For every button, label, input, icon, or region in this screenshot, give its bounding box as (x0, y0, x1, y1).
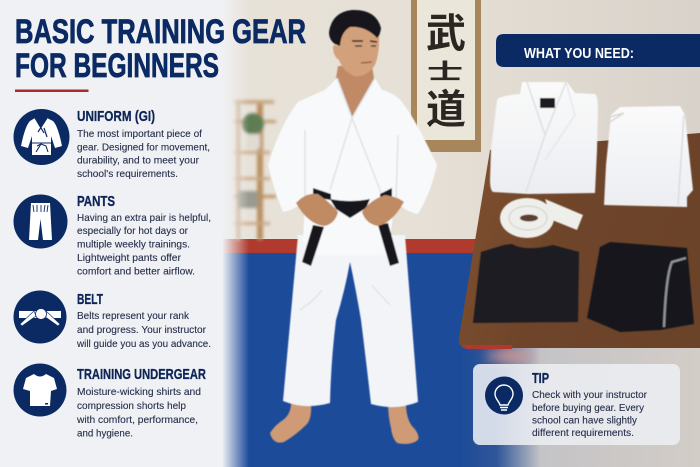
tip text: Check with your instructor (532, 389, 647, 401)
neck and head (329, 10, 381, 122)
belt text: and progress. Your instructor (77, 324, 206, 336)
belt text: Belts represent your rank (77, 310, 190, 322)
table front red edge (462, 345, 512, 349)
wooden shelf with plant (234, 100, 276, 240)
black shirt (473, 244, 579, 323)
white belt coil (500, 198, 583, 238)
icon: pants (14, 194, 68, 248)
icon: t-shirt (14, 364, 66, 416)
title: FOR BEGINNERS (15, 47, 219, 85)
undergear text: with comfort, performance, (76, 414, 198, 426)
tip heading: TIP (532, 371, 549, 387)
tip text: before buying gear. Every (532, 402, 645, 414)
pants (283, 235, 418, 407)
icon: gi jacket (14, 109, 70, 165)
uniform text: durability, and to meet your (77, 154, 199, 166)
title underline (15, 90, 88, 92)
pants text: multiple weekly trainings. (77, 238, 190, 250)
jacket (268, 78, 437, 255)
section: uniform (14, 109, 213, 180)
tip text: different requirements. (532, 427, 634, 439)
banner: what you need (496, 34, 700, 67)
folded gi jacket (490, 82, 598, 194)
hands (296, 194, 404, 226)
uniform text: gear. Designed for movement, (77, 142, 210, 154)
section: pants (14, 194, 214, 278)
uniform heading: UNIFORM (GI) (77, 109, 155, 125)
wooden table (459, 133, 700, 348)
wall scroll with kanji: 道 (426, 77, 466, 135)
folded pants (604, 106, 693, 207)
pants text: Having an extra pair is helpful, (77, 212, 211, 224)
tip text: school can have slightly (532, 414, 638, 426)
icon: light bulb (485, 376, 523, 414)
wall scroll with kanji: 士 (427, 54, 463, 86)
black compression shorts (587, 242, 694, 332)
icon: belt (14, 290, 66, 344)
tip card (473, 364, 680, 445)
black belt (302, 188, 399, 266)
uniform text: The most important piece of (77, 128, 202, 140)
belt text: will guide you as you advance. (76, 338, 211, 350)
belt heading: BELT (77, 292, 103, 308)
banner: what you need: WHAT YOU NEED: (524, 46, 634, 62)
pants text: Lightweight pants offer (77, 252, 181, 264)
section: belt (14, 290, 211, 350)
section: training undergear (14, 364, 206, 440)
pants heading: PANTS (77, 194, 115, 210)
pants text: especially for hot days or (77, 225, 188, 237)
wall scroll with kanji: 武 (426, 1, 466, 59)
undergear text: Moisture-wicking shirts and (77, 386, 201, 398)
title: BASIC TRAINING GEAR (15, 13, 306, 51)
undergear text: compression shorts help (77, 400, 186, 412)
undergear heading: TRAINING UNDERGEAR (77, 367, 206, 383)
feet (270, 403, 418, 444)
pants text: comfort and better airflow. (77, 266, 195, 278)
person in white gi (268, 10, 437, 444)
undergear text: and hygiene. (77, 428, 133, 440)
uniform text: school's requirements. (77, 168, 178, 180)
wall scroll with kanji (411, 0, 481, 152)
left panel fade (0, 0, 249, 467)
